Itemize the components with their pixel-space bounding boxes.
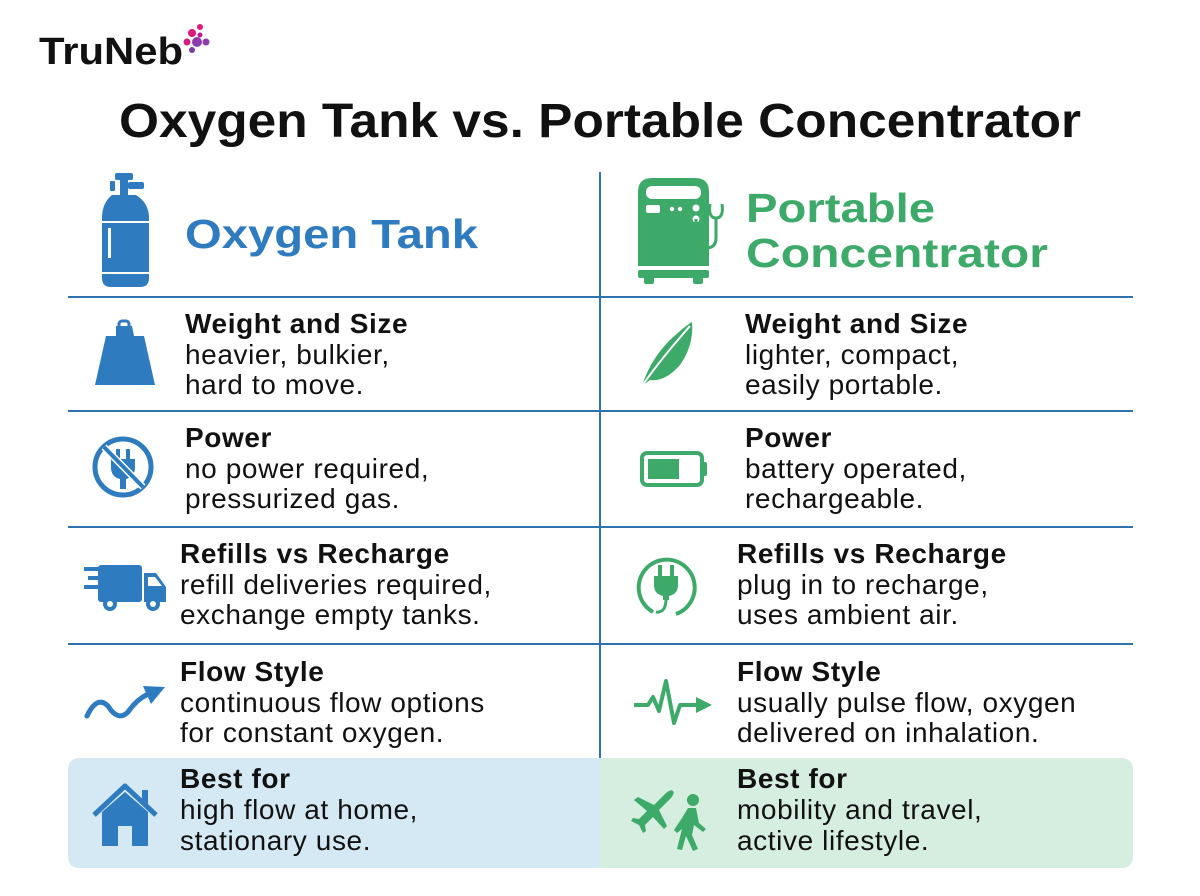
row: best for right: Best for: [737, 763, 848, 794]
row: power left: [95, 422, 429, 514]
row: refills right: [639, 538, 1007, 630]
header: oxygen tank: Oxygen Tank: [185, 211, 478, 257]
row: weight right: [642, 308, 968, 400]
header: portable concentrator: [746, 185, 1048, 276]
row: refills left: refill deliveries required,: [180, 569, 492, 600]
row: power left: Power: [185, 422, 272, 453]
best-for background band: [68, 758, 1133, 868]
row: refills left: exchange empty tanks.: [180, 599, 481, 630]
row: weight right: Weight and Size: [745, 308, 968, 339]
logo: TruNeb: [39, 31, 183, 73]
row: flow left: continuous flow options: [180, 687, 485, 718]
row: weight right: lighter, compact,: [745, 339, 959, 370]
row: best for right: [631, 763, 982, 856]
icon: concentrator: [638, 178, 722, 284]
row: best for left: stationary use.: [180, 825, 371, 856]
logo: [39, 24, 210, 73]
icon: oxygen tank: [102, 173, 149, 287]
row: power right: battery operated,: [745, 453, 967, 484]
row: best for right: active lifestyle.: [737, 825, 929, 856]
row: flow right: delivered on inhalation.: [737, 717, 1039, 748]
header: portable concentrator: Concentrator: [746, 230, 1048, 276]
title: Oxygen Tank vs. Portable Concentrator: [119, 95, 1081, 148]
row: refills right: Refills vs Recharge: [737, 538, 1007, 569]
row: power right: rechargeable.: [745, 483, 924, 514]
row: best for left: [94, 763, 418, 856]
row: weight right: easily portable.: [745, 369, 943, 400]
row: flow right: Flow Style: [737, 656, 881, 687]
row: flow right: usually pulse flow, oxygen: [737, 687, 1076, 718]
row: refills right: uses ambient air.: [737, 599, 959, 630]
row: flow left: [87, 656, 485, 748]
row: weight left: [95, 308, 408, 400]
header: portable concentrator: Portable: [746, 185, 935, 231]
row: power left: no power required,: [185, 453, 429, 484]
row: weight left: hard to move.: [185, 369, 364, 400]
row: refills left: Refills vs Recharge: [180, 538, 450, 569]
row: power left: pressurized gas.: [185, 483, 400, 514]
row: flow left: for constant oxygen.: [180, 717, 444, 748]
row: refills right: plug in to recharge,: [737, 569, 989, 600]
row: best for right: mobility and travel,: [737, 794, 982, 825]
row: refills left: [84, 538, 492, 630]
row: flow left: Flow Style: [180, 656, 324, 687]
row: power right: Power: [745, 422, 832, 453]
row: weight left: Weight and Size: [185, 308, 408, 339]
row: best for left: Best for: [180, 763, 291, 794]
row: flow right: [634, 656, 1076, 748]
row: power right: [642, 422, 967, 514]
row: weight left: heavier, bulkier,: [185, 339, 390, 370]
row: best for left: high flow at home,: [180, 794, 418, 825]
